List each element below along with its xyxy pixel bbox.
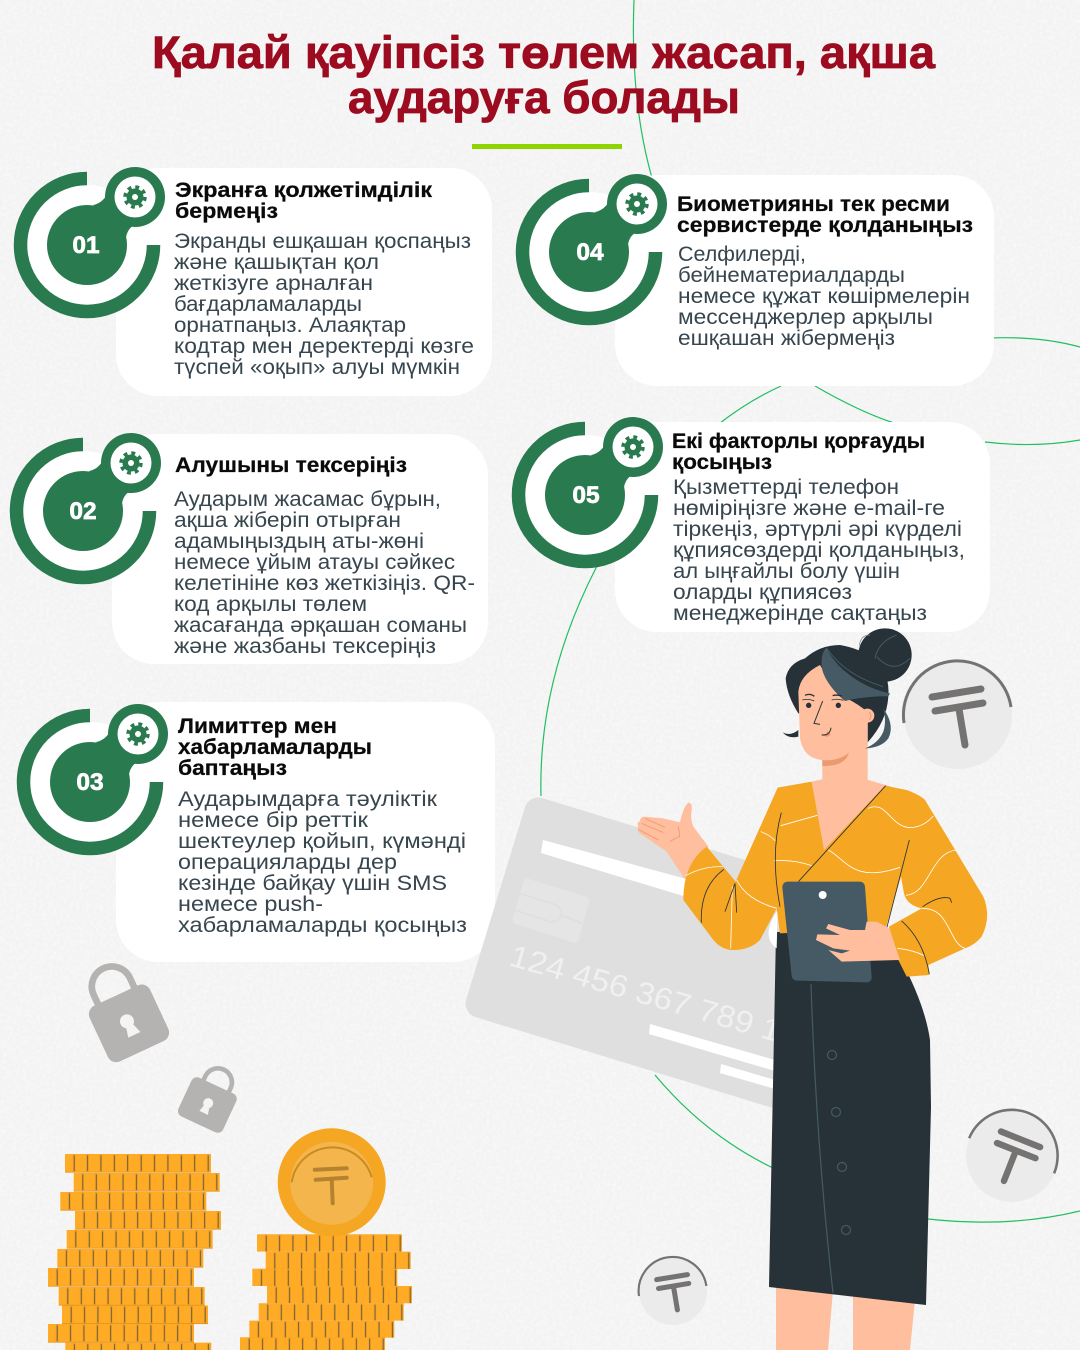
heading 02: Алушыны тексеріңіз	[175, 453, 407, 477]
body text 05: ал ыңғайлы болу үшін	[673, 559, 900, 583]
body text 05: Қызметтерді телефон	[673, 475, 899, 499]
body text 05: құпиясөздерді қолданыңыз,	[673, 538, 965, 562]
gold tenge coin	[278, 1128, 386, 1236]
coin stack right	[240, 1234, 412, 1350]
body text 05: менеджерінде сақтаңыз	[673, 601, 927, 625]
heading 05: қосыңыз	[672, 450, 772, 474]
heading 01: бермеңіз	[175, 199, 278, 223]
panel: step 03	[24, 702, 495, 962]
body text 03: хабарламаларды қосыңыз	[178, 913, 467, 937]
body text 01: түспей «оқып» алуы мүмкін	[174, 355, 460, 379]
body text 02: келетініне көз жеткізіңіз. QR-	[174, 571, 475, 595]
badge 05	[518, 417, 663, 562]
body text 02: және жазбаны тексеріңіз	[174, 634, 436, 658]
skirt	[769, 930, 931, 1305]
heading 01	[175, 178, 432, 223]
legs	[776, 1285, 915, 1350]
title underline	[472, 144, 622, 149]
body text 04	[678, 242, 970, 350]
badge 04: 04	[576, 239, 604, 266]
heading 01: Экранға қолжетімділік	[175, 178, 432, 202]
body text 01: бағдарламаларды	[174, 292, 362, 316]
body text 03: шектеулер қойып, күмәнді	[178, 829, 466, 853]
body text 02: немесе ұйым атауы сәйкес	[174, 550, 455, 574]
heading 04: сервистерде қолданыңыз	[677, 213, 973, 237]
padlock small	[176, 1059, 246, 1135]
body text 03: немесе бір реттік	[178, 808, 369, 832]
body text 05	[673, 475, 965, 625]
tenge coin grey small	[639, 1257, 707, 1325]
body text 02: Аударым жасамас бұрын,	[174, 487, 441, 511]
body text 04: немесе құжат көшірмелерін	[678, 284, 970, 308]
card 01 background	[116, 168, 492, 396]
body text 01: кодтар мен деректерді көзге	[174, 334, 474, 358]
panel: step 01	[20, 167, 492, 396]
heading 03: Лимиттер мен	[178, 714, 337, 738]
body text 04: бейнематериалдарды	[678, 263, 905, 287]
upper body	[683, 779, 987, 982]
body text 02: адамыңыздың аты-жөні	[174, 529, 424, 553]
body text 05: нөміріңізге және e-mail-ге	[673, 496, 945, 520]
body text 02: код арқылы төлем	[174, 592, 367, 616]
panel: step 02	[16, 433, 488, 664]
body text 02: жасағанда әрқашан соманы	[174, 613, 467, 637]
badge 01: 01	[72, 232, 100, 259]
body text 01: Экранды ешқашан қоспаңыз	[174, 229, 471, 253]
body text 01: орнатпаңыз. Алаяқтар	[174, 313, 406, 337]
body text 05: оларды құпиясөз	[673, 580, 852, 604]
tenge coin grey large	[903, 661, 1012, 769]
badge 01	[20, 167, 165, 312]
badge 04	[522, 174, 667, 318]
blouse lines	[686, 807, 965, 956]
woman illustration	[637, 628, 987, 1350]
bank card illustration: 124 456 367 789 1	[506, 938, 785, 1049]
card 05 background	[615, 422, 990, 632]
body text 01: және қашықтан қол	[174, 250, 379, 274]
body text 02	[174, 487, 475, 658]
badge 02: 02	[69, 498, 97, 525]
head	[783, 628, 912, 785]
right hand	[816, 922, 900, 962]
title	[152, 27, 936, 123]
tenge coin grey right	[949, 1093, 1075, 1219]
heading 04	[677, 192, 973, 237]
blouse	[683, 782, 987, 977]
body text 04: Селфилерді,	[678, 242, 806, 266]
green background curves	[541, 0, 1080, 1222]
heading 03	[178, 714, 372, 780]
panel: step 05	[518, 417, 990, 632]
coin stack left	[48, 1154, 221, 1350]
heading 05	[672, 429, 925, 474]
badge 02	[16, 433, 161, 578]
card 02 background	[112, 434, 488, 664]
tablet	[782, 882, 872, 982]
card 04 background	[615, 175, 994, 386]
badge 03	[24, 704, 168, 848]
body text 03: немесе push-	[178, 892, 323, 916]
heading 03: хабарламаларды	[178, 735, 372, 759]
badge 05: 05	[572, 482, 600, 509]
badge 03: 03	[76, 769, 104, 796]
body text 04: ешқашан жібермеңіз	[678, 326, 895, 350]
title: Қалай қауіпсіз төлем жасап, ақша	[152, 27, 936, 78]
padlock large	[73, 954, 172, 1065]
heading 03: баптаңыз	[178, 756, 287, 780]
left hand	[637, 803, 708, 879]
title: аударуға болады	[348, 72, 740, 123]
bank card illustration	[462, 794, 854, 1112]
panel: step 04	[522, 174, 994, 386]
body text 02: ақша жіберіп отырған	[174, 508, 401, 532]
body text 03: кезінде байқау үшін SMS	[178, 871, 447, 895]
body text 01: жеткізуге арналған	[174, 271, 373, 295]
body text 03: операцияларды дер	[178, 850, 397, 874]
body text 04: мессенджерлер арқылы	[678, 305, 933, 329]
body text 05: тіркеңіз, әртүрлі әрі күрделі	[673, 517, 962, 541]
card 03 background	[116, 702, 495, 962]
body text 01	[174, 229, 474, 379]
heading 05: Екі факторлы қорғауды	[672, 429, 925, 453]
body text 03	[178, 787, 467, 937]
heading 04: Биометрияны тек ресми	[677, 192, 950, 216]
body text 03: Аударымдарға тәуліктік	[178, 787, 438, 811]
